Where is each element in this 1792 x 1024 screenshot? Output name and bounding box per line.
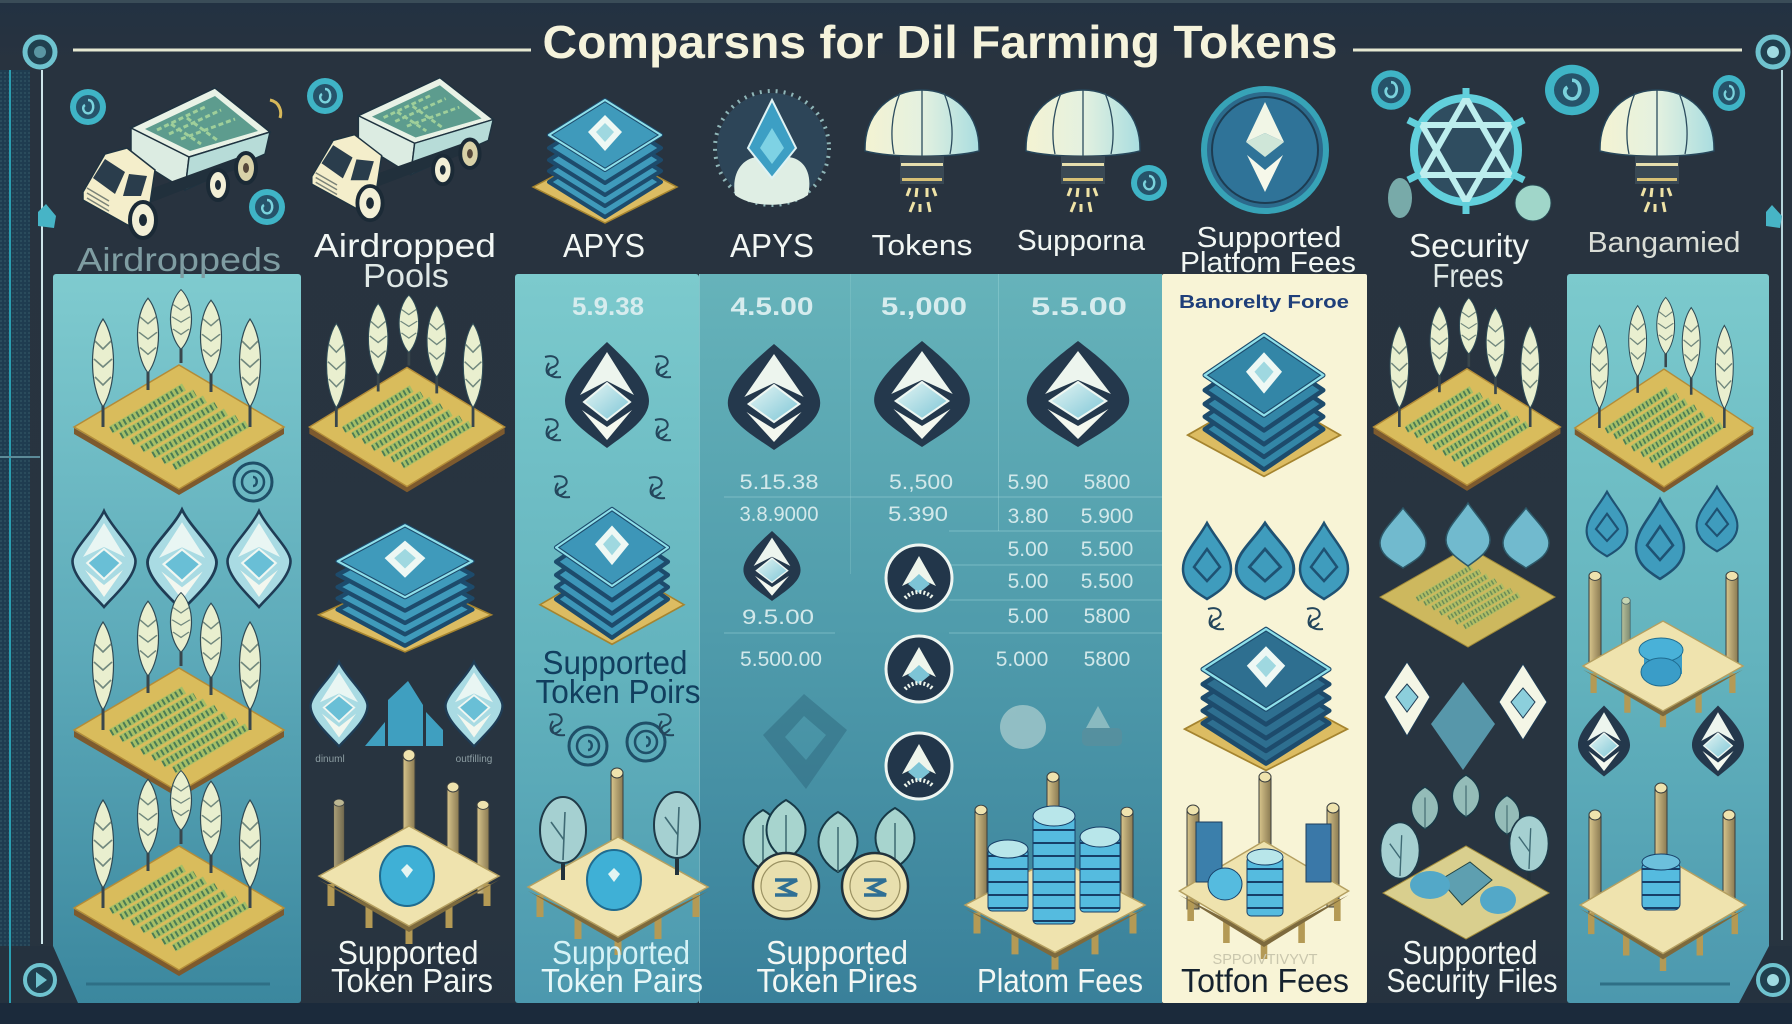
- table values: 3.80: [1008, 505, 1048, 528]
- table values: 5.000: [996, 648, 1048, 671]
- label: Supported Security Files: Security Files: [1386, 962, 1558, 999]
- table values: 5.900: [1081, 505, 1133, 528]
- value: 5.5.00: [1031, 293, 1127, 321]
- column 4 to 6 background: [699, 274, 1162, 1003]
- heading: Security Frees: Security: [1409, 227, 1529, 264]
- icon: token stack: [319, 525, 491, 652]
- column background: [515, 274, 699, 1003]
- panel: column 4 APYs: [715, 91, 918, 999]
- icon: staked platform: [319, 749, 499, 944]
- table values: 5800: [1084, 648, 1130, 671]
- icons: badges: [1371, 65, 1599, 221]
- icon: farm field: [1575, 297, 1753, 493]
- table values: 3.8.9000: [740, 503, 818, 526]
- label: Supported Token Pairs: Supported: [338, 934, 478, 971]
- table values: 5.500.00: [740, 648, 822, 671]
- icon: farm field: [1374, 298, 1560, 491]
- label: Supported Token Pairs: [331, 934, 493, 999]
- label: Totfon Fees: Totfon Fees: [1181, 962, 1349, 999]
- icon: spiral badge: [234, 463, 272, 501]
- label: Supported Token Pairs: Supported: [552, 934, 690, 971]
- table values: 5.390: [888, 503, 948, 526]
- icon: ethereum token: [728, 344, 820, 450]
- icon: small token: [743, 531, 801, 601]
- table values: 5.,500: [889, 471, 953, 494]
- heading: Airdroppeds: Airdroppeds: [77, 241, 281, 278]
- icon: leaves and coins: [744, 800, 914, 919]
- icon: ethereum token: [874, 341, 970, 447]
- icon: round tokens: [886, 545, 952, 799]
- icon: farm field: [309, 295, 505, 492]
- heading: Bangamied: Bangamied: [1588, 227, 1740, 259]
- value: 5.,000: [881, 293, 967, 321]
- table values: 5.15.38: [740, 471, 818, 494]
- icon: staked platform: [1583, 571, 1743, 727]
- icon: coin stacks on platform: [965, 772, 1145, 970]
- label: Supported Security Files: [1386, 934, 1558, 999]
- table values: [888, 471, 953, 526]
- icon: token stack: [533, 100, 677, 223]
- heading: Security Frees: [1409, 227, 1529, 294]
- table values: 5.00: [1008, 538, 1048, 561]
- small badges: [554, 476, 665, 498]
- icon: teal token: [307, 78, 343, 114]
- icon: farm field 3: [74, 771, 284, 976]
- icon: small badge: [1131, 165, 1167, 201]
- table values: 5.500: [1081, 570, 1133, 593]
- label: Supported Token Poirs: [536, 644, 700, 710]
- table values: [740, 471, 822, 671]
- value: 5.9.38: [572, 293, 644, 321]
- icon: dark token stack: [1185, 629, 1347, 770]
- icon: parachute: [1600, 90, 1714, 212]
- label: Supported Token Pairs: Token Pairs: [541, 962, 703, 999]
- label: Supported Token Poirs: Token Poirs: [536, 673, 700, 710]
- table values: 5.00: [1008, 570, 1048, 593]
- panel: column 2 airdropped pools: [307, 78, 505, 999]
- icon: ghost gem: [763, 694, 847, 789]
- table values: 5.500: [1081, 538, 1133, 561]
- icon: gem in dotted ring: [715, 91, 829, 205]
- heading: Airdropped Pools: Airdropped: [314, 227, 496, 264]
- icon: token stack 2: [540, 509, 684, 644]
- panel: column 1 airdropped: [53, 88, 301, 1003]
- table values: [996, 471, 1133, 671]
- heading: Supporna: Supporna: [1017, 225, 1146, 257]
- icon: token gems: [72, 510, 290, 610]
- icon: gem field: [1380, 503, 1555, 647]
- table values: 5.00: [1008, 605, 1048, 628]
- icon: tree platform: [1380, 815, 1549, 939]
- label: Supported Token Pires: Token Pires: [756, 962, 918, 999]
- panel: column 6 supported: [965, 90, 1167, 999]
- icon: parachute: [865, 90, 979, 212]
- heading: Security Frees: Frees: [1432, 257, 1504, 294]
- icon: dump truck: [312, 78, 493, 220]
- small caption: SPPOIVTIVYVT: [1212, 951, 1318, 968]
- icon: token stack: [1188, 335, 1340, 476]
- label: Supported Token Pairs: Token Pairs: [331, 962, 493, 999]
- icon: small arc: [270, 100, 281, 118]
- icon: ethereum tokens: [1578, 705, 1744, 777]
- icon: gems and mountain: [310, 662, 502, 746]
- icon: small badge: [1713, 75, 1745, 111]
- icon: ethereum token: [1027, 341, 1129, 447]
- small caption: dinuml: [315, 754, 345, 765]
- icon: farm field: [74, 290, 284, 495]
- heading: Supported Platfom Fees: Platfom Fees: [1180, 247, 1356, 279]
- label: Supported Token Pires: Supported: [766, 934, 908, 971]
- label: Supported Token Poirs: Supported: [542, 644, 688, 681]
- icon: staked platform 2: [1580, 783, 1746, 971]
- icon: token coin: [1204, 89, 1326, 211]
- heading: Airdropped Pools: Pools: [363, 257, 449, 294]
- column background: [53, 274, 301, 1003]
- label: Supported Token Pairs: [541, 934, 703, 999]
- icon: pale leaves: [1411, 775, 1520, 834]
- table values: 5.90: [1008, 471, 1048, 494]
- panel: column 8 security: [1371, 65, 1599, 999]
- icon: coin stacks on platform: [1179, 772, 1349, 959]
- icon: ethereum token: [545, 342, 671, 448]
- small coins: [549, 714, 674, 765]
- heading: Supported Platfom Fees: Supported: [1196, 222, 1342, 254]
- table values: 5800: [1084, 605, 1130, 628]
- label: Platom Fees: Platom Fees: [977, 962, 1143, 999]
- label: Supported Token Pires: [756, 934, 918, 999]
- value: 4.5.00: [730, 293, 814, 321]
- icon: blue gems: [1587, 487, 1737, 579]
- column background: [1162, 274, 1367, 1003]
- icon: parachute: [1026, 90, 1140, 212]
- icon: blue gems: [1183, 523, 1348, 599]
- icon: swirl: [249, 189, 285, 225]
- label: Supported Security Files: Supported: [1402, 934, 1538, 971]
- icon: staked platform with trees: [528, 768, 708, 955]
- small caption: [315, 754, 492, 765]
- icon: star wheel: [1408, 88, 1524, 214]
- panel: column 3 APYs: [515, 100, 708, 1003]
- heading: Supported Platfom Fees: [1180, 222, 1356, 279]
- icon: white gems: [1384, 662, 1547, 770]
- small swirls: [1208, 608, 1323, 629]
- ghost shapes: [1000, 705, 1122, 749]
- table values: 5800: [1084, 471, 1130, 494]
- heading: Tokens: Tokens: [872, 230, 972, 262]
- column background: [1567, 274, 1769, 1003]
- heading: Airdropped Pools: [314, 227, 496, 294]
- panel: column 9 bangamied: [1567, 75, 1769, 1003]
- panel: column 5 tokens: [865, 90, 979, 799]
- icon: dump truck: [83, 88, 270, 238]
- heading: APYS: APYS: [730, 227, 814, 264]
- title: Comparsns for Dil Farming Tokens: [542, 16, 1338, 68]
- icon: farm field 2: [74, 593, 284, 798]
- small caption: outfilling: [456, 754, 492, 765]
- icon: teal token: [70, 89, 106, 125]
- heading: APYS: APYS: [563, 227, 645, 264]
- subheading: Banorelty Foroe: [1179, 292, 1349, 312]
- table values: 9.5.00: [742, 606, 814, 629]
- panel: column 7 cream highlight: [1162, 89, 1367, 1003]
- panel: middle columns background: [699, 274, 1162, 1003]
